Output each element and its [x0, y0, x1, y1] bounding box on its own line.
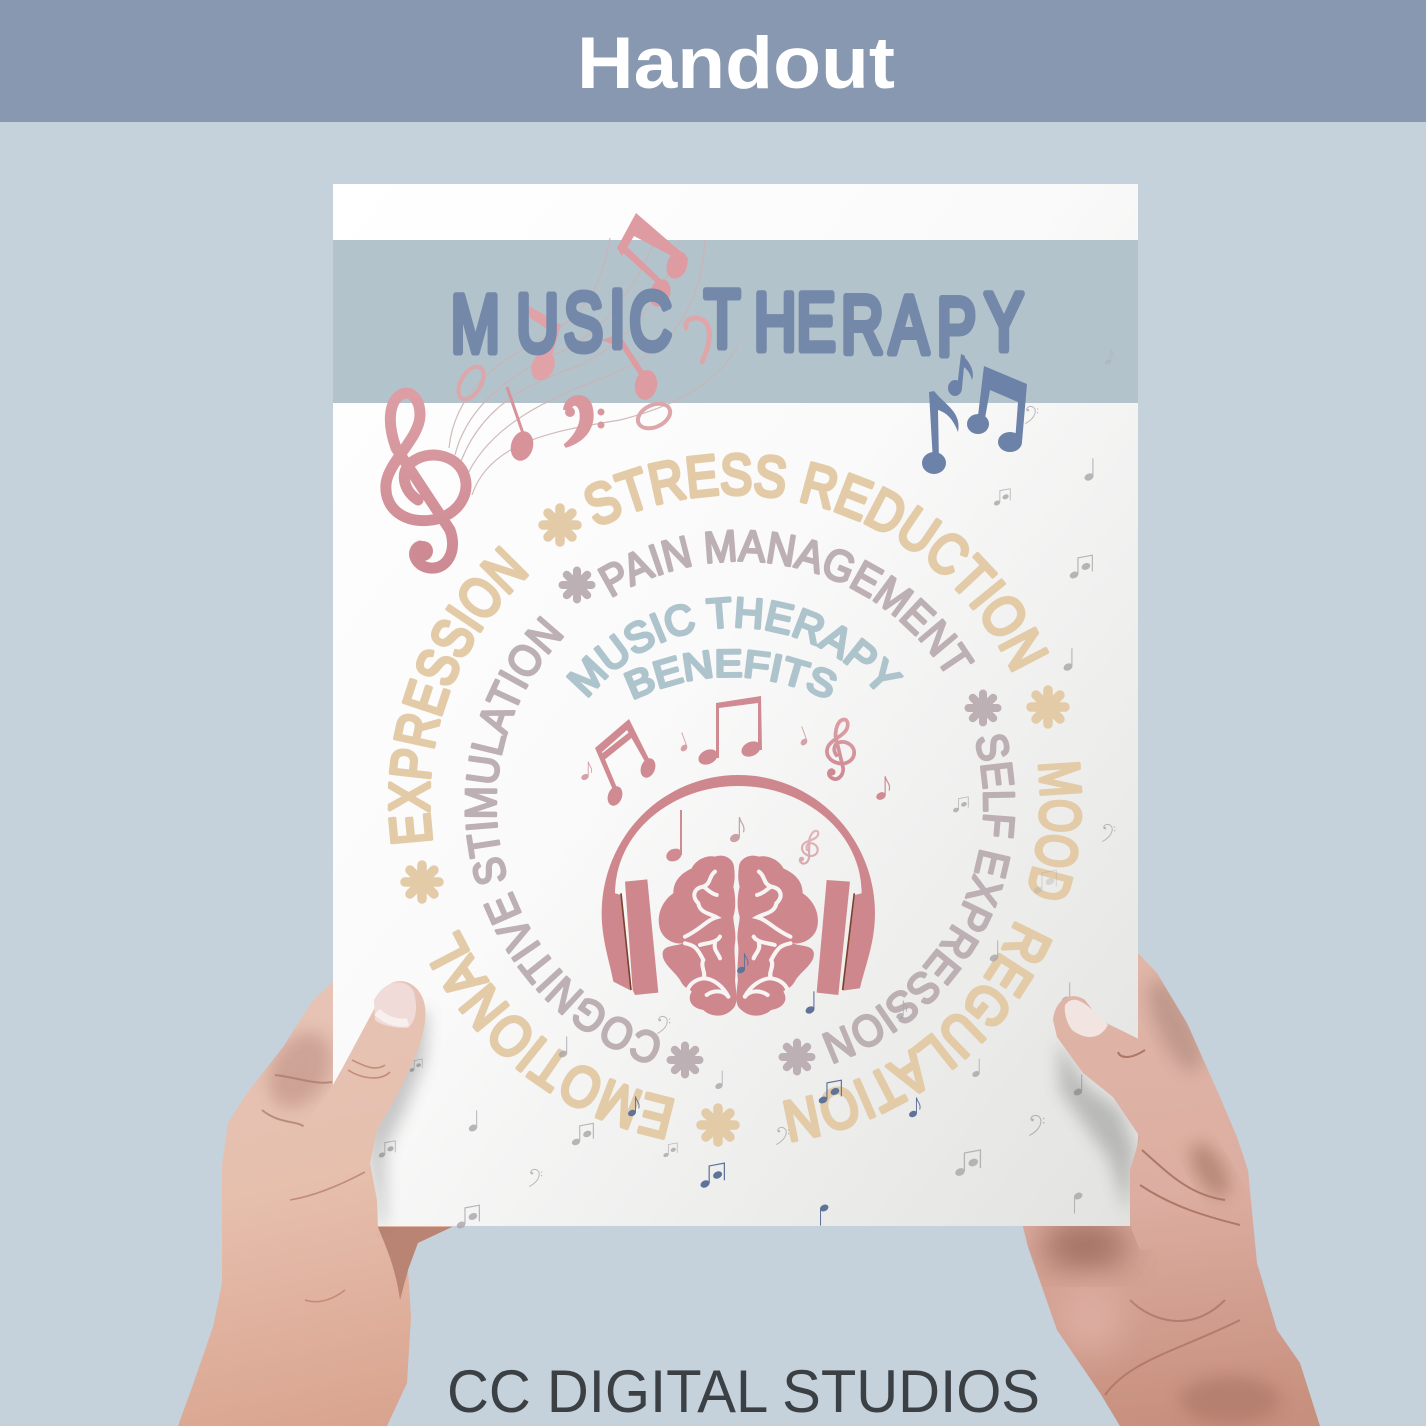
title: Music Therapy: MUSIC: [451, 274, 672, 370]
label: mood: MOOD: [1028, 762, 1082, 900]
icon: quarter note in headphones: [664, 810, 684, 864]
panel: title band: [333, 240, 1138, 403]
icon: headphones: [602, 775, 875, 995]
heading: Handout: Handout: [577, 23, 895, 104]
text ring: outer benefits: [388, 452, 1082, 1145]
icon: brain: [659, 856, 818, 1016]
label: expression: EXPRESSION: [388, 545, 530, 844]
icons: inner ring flowers: [563, 571, 997, 1074]
icon: pink notes over headphones: [595, 696, 763, 808]
shadow: thumbs on paper: [365, 1010, 1134, 1225]
subheading: music therapy benefits: MUSIC THERAPY: [566, 596, 904, 698]
icon: faded bass clef in band: [686, 318, 709, 362]
icon: small pink notes: [580, 717, 890, 867]
left hand behind paper: [178, 982, 452, 1426]
icons: scattered small grey notes: [378, 349, 1115, 1230]
left thumb: [240, 981, 426, 1302]
icons: outer ring flowers: [405, 508, 1065, 1142]
icon: whole notes: [453, 362, 674, 433]
icon: treble clef: [386, 393, 466, 568]
label: cognitive stimulation: COGNITIVE STIMULATION: [464, 616, 660, 1063]
icon: bass clef: [565, 397, 604, 446]
staff lines: [449, 238, 738, 495]
header band: [0, 0, 1426, 122]
right hand behind paper: [1020, 945, 1330, 1426]
subheading: music therapy benefits: BENEFITS: [623, 648, 837, 700]
icon: pink beamed notes top: [617, 213, 691, 310]
icon: blue music notes: [922, 354, 1027, 474]
icon: quarter note: [507, 387, 537, 463]
icon: pink note right: [602, 332, 659, 402]
label: regulation: REGULATION: [782, 921, 1053, 1143]
panel: handout paper: [333, 184, 1168, 1228]
icon: pink note left: [526, 304, 561, 384]
right thumb: [1053, 996, 1240, 1250]
label: self expression: SELF EXPRESSION: [822, 734, 1016, 1064]
footer: studio name: CC DIGITAL STUDIOS: [447, 1358, 1040, 1425]
label: pain management: PAIN MANAGEMENT: [597, 529, 975, 672]
text ring: inner benefits: [464, 529, 1016, 1064]
icons: scattered small blue notes: [627, 954, 920, 1226]
title: Music Therapy: THERAPY: [704, 274, 1024, 373]
label: stress reduction: STRESS REDUCTION: [584, 452, 1050, 672]
label: emotional: EMOTIONAL: [429, 929, 675, 1140]
